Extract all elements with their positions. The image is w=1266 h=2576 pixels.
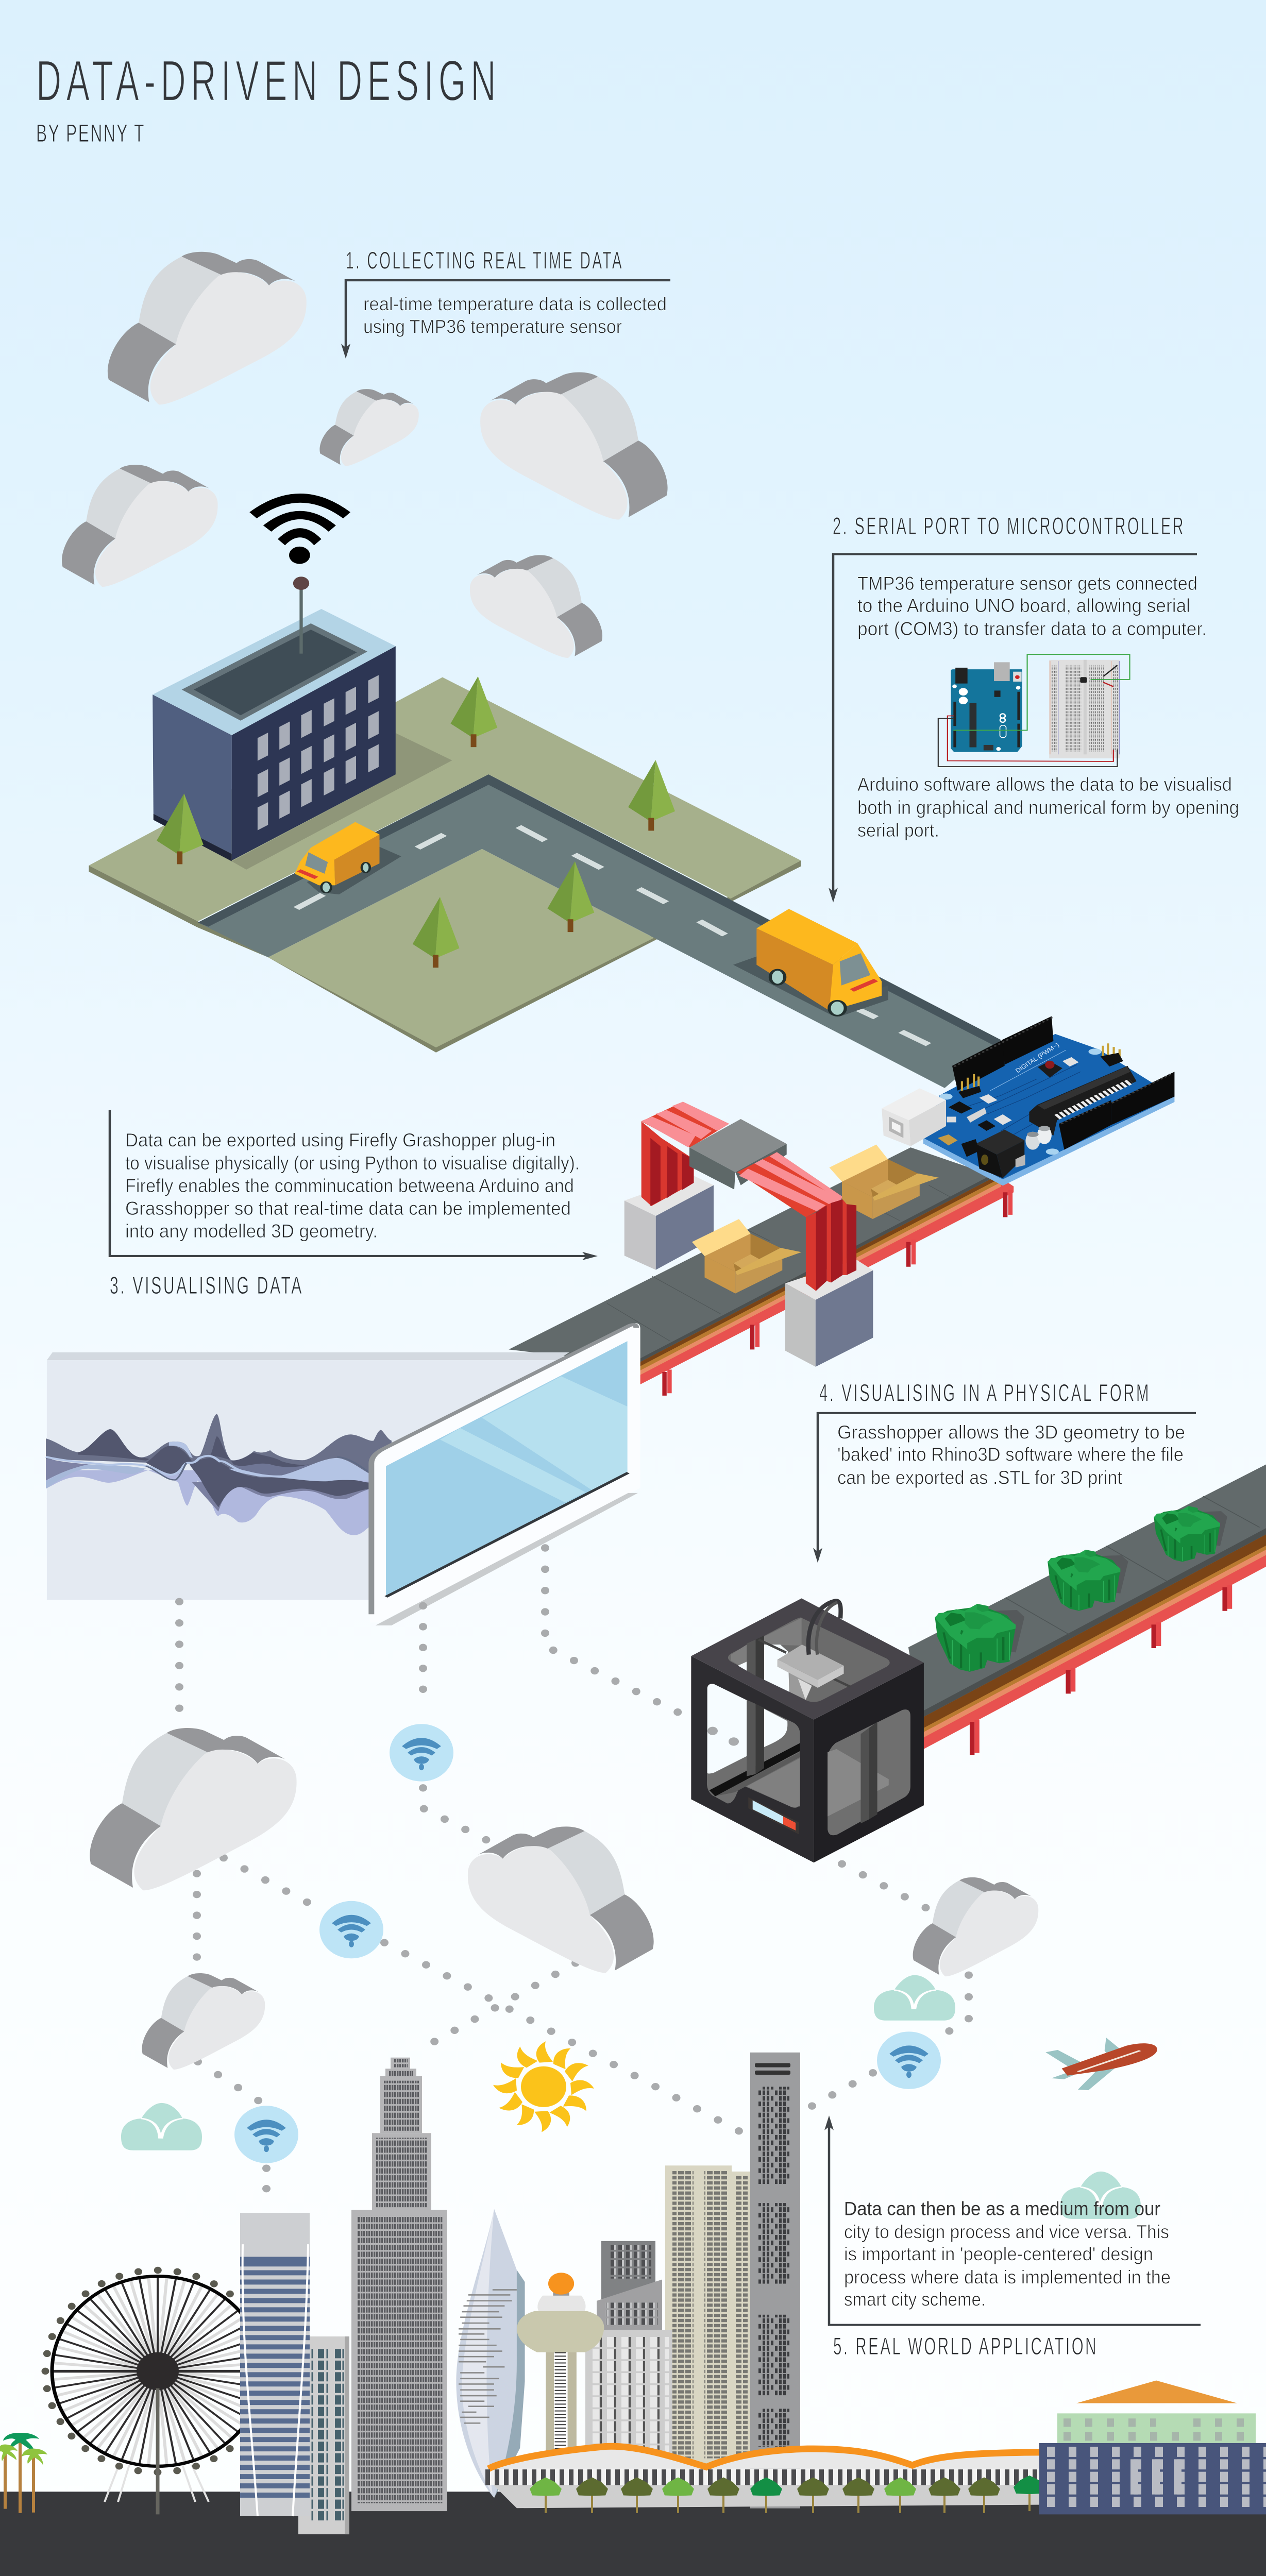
step 1 heading: 1. COLLECTING REAL TIME DATA [346, 246, 623, 274]
airplane [1045, 2038, 1157, 2090]
step 4 text: 'baked' into Rhino3D software where the file [837, 1444, 1184, 1465]
mint bushes [121, 1975, 1141, 2219]
step 2 text bottom: serial port. [857, 820, 939, 841]
breadboard [1049, 660, 1120, 758]
conveyor belt upper, Arduino board and gantry [509, 1016, 1174, 1396]
conveyor belt upper [509, 1147, 1014, 1396]
step 3 text: Firefly enables the comminucation betweena Arduino and [125, 1176, 574, 1196]
sail-shaped tower [456, 2209, 525, 2498]
clouds upper sky [62, 252, 668, 658]
right uprights [806, 1199, 856, 1291]
headers [952, 1016, 1174, 1150]
monitor [370, 1323, 640, 1625]
road [198, 774, 1001, 1088]
gold pins [958, 1043, 1123, 1098]
step 5 text: Data can then be as a medium from our [844, 2198, 1160, 2219]
step 3 arrow bracket [110, 1110, 598, 1260]
title: DATA-DRIVEN DESIGN [36, 48, 501, 113]
tall grey tower left [351, 2058, 447, 2511]
step 1 text: using TMP36 temperature sensor [363, 316, 622, 337]
small teal-window tower [298, 2336, 349, 2534]
step 5 text [844, 2198, 1171, 2310]
red beam right [737, 1152, 843, 1217]
capacitors [1025, 1126, 1052, 1150]
extruder [778, 1601, 844, 1700]
staggered tower right [750, 2053, 800, 2509]
building [153, 609, 452, 870]
step 4 text: Grasshopper allows the 3D geometry to be [837, 1422, 1185, 1443]
reset button [1038, 1061, 1062, 1078]
step 1 arrow bracket [341, 280, 670, 359]
wifi bubbles [234, 1724, 941, 2163]
dots seen through printer glass [707, 1727, 739, 1745]
ground [0, 2492, 1266, 2576]
step 2 text top: to the Arduino UNO board, allowing serial [857, 596, 1190, 616]
Arduino and breadboard wiring diagram [938, 654, 1130, 767]
step 3 text [125, 1130, 580, 1242]
left pillar [624, 1176, 714, 1270]
trees [157, 676, 675, 968]
Arduino UNO [951, 662, 1022, 752]
streamgraph [46, 1414, 392, 1535]
step 3 heading: 3. VISUALISING DATA [110, 1271, 303, 1299]
row of street trees [530, 2476, 1045, 2513]
observation tower [517, 2273, 604, 2452]
step 3 text: Grasshopper so that real-time data can be implemented [125, 1198, 571, 1219]
small components [938, 1057, 1079, 1157]
printer display [748, 1798, 799, 1835]
3D printed models [935, 1506, 1227, 1672]
step 2 text top: TMP36 temperature sensor gets connected [857, 573, 1197, 594]
box front [692, 1219, 801, 1294]
esplanade columns [485, 2468, 1041, 2486]
beige tower [665, 2165, 751, 2465]
small van [295, 822, 401, 894]
Ferris wheel [45, 2270, 270, 2514]
clouds lower sky [90, 1728, 1038, 2070]
step 3 text: into any modelled 3D geometry. [125, 1221, 378, 1242]
step 5 text: smart city scheme. [844, 2290, 986, 2310]
sun [493, 2041, 594, 2132]
blue striped tower [240, 2213, 310, 2516]
step 4 arrow bracket [813, 1413, 1196, 1563]
step 3 text: Data can be exported using Firefly Grashopper plug-in [125, 1130, 555, 1151]
esplanade canopy [486, 2446, 1041, 2508]
left uprights [642, 1122, 694, 1206]
step 2 text bottom [857, 774, 1239, 841]
step 2 text top [857, 573, 1207, 639]
printer top frame [691, 1598, 924, 1720]
data visualisation panel [47, 1352, 569, 1600]
ground fields [89, 677, 801, 1047]
step 5 text: process where data is implemented in the [844, 2267, 1171, 2288]
wifi icon: building [249, 494, 350, 564]
box rear [829, 1145, 939, 1219]
power jack [976, 1130, 1025, 1178]
printer glass right [828, 1709, 910, 1835]
dotted connection lines [179, 1548, 969, 2209]
step 5 text: city to design process and vice versa. This [844, 2222, 1169, 2243]
step 5 text: is important in 'people-centered' design [844, 2244, 1153, 2265]
step 4 text: can be exported as .STL for 3D print [837, 1467, 1122, 1488]
step 4 text [837, 1422, 1185, 1488]
step 1 text: real-time temperature data is collected [363, 294, 667, 315]
large van [733, 909, 888, 1016]
step 1 text [363, 294, 667, 337]
palm trees [0, 2433, 47, 2513]
step 2 text top: port (COM3) to transfer data to a computer. [857, 619, 1207, 639]
ground side [89, 860, 801, 1053]
right pillar [785, 1260, 873, 1367]
step 5 arrow bracket [824, 2115, 1201, 2325]
mid buildings [585, 2241, 672, 2460]
jumper wires [938, 654, 1130, 767]
USB connector [882, 1088, 946, 1146]
3D printer [691, 1598, 924, 1862]
red beam left [642, 1102, 729, 1147]
conveyor belt lower [908, 1464, 1266, 1755]
microcontroller chip [1029, 1066, 1137, 1136]
board silkscreen label: DIGITAL (PWM~) [1014, 1041, 1060, 1074]
antenna [293, 577, 309, 654]
byline: BY PENNY T [36, 120, 145, 147]
road and ground scene [89, 577, 1001, 1088]
step 3 text: to visualise physically (or using Python to visualise digitally). [125, 1153, 580, 1174]
national gallery building [1039, 2381, 1266, 2514]
carriage [689, 1119, 787, 1190]
step 2 arrow bracket [829, 554, 1197, 903]
Arduino board [882, 1016, 1174, 1185]
printer glass left [707, 1684, 800, 1808]
